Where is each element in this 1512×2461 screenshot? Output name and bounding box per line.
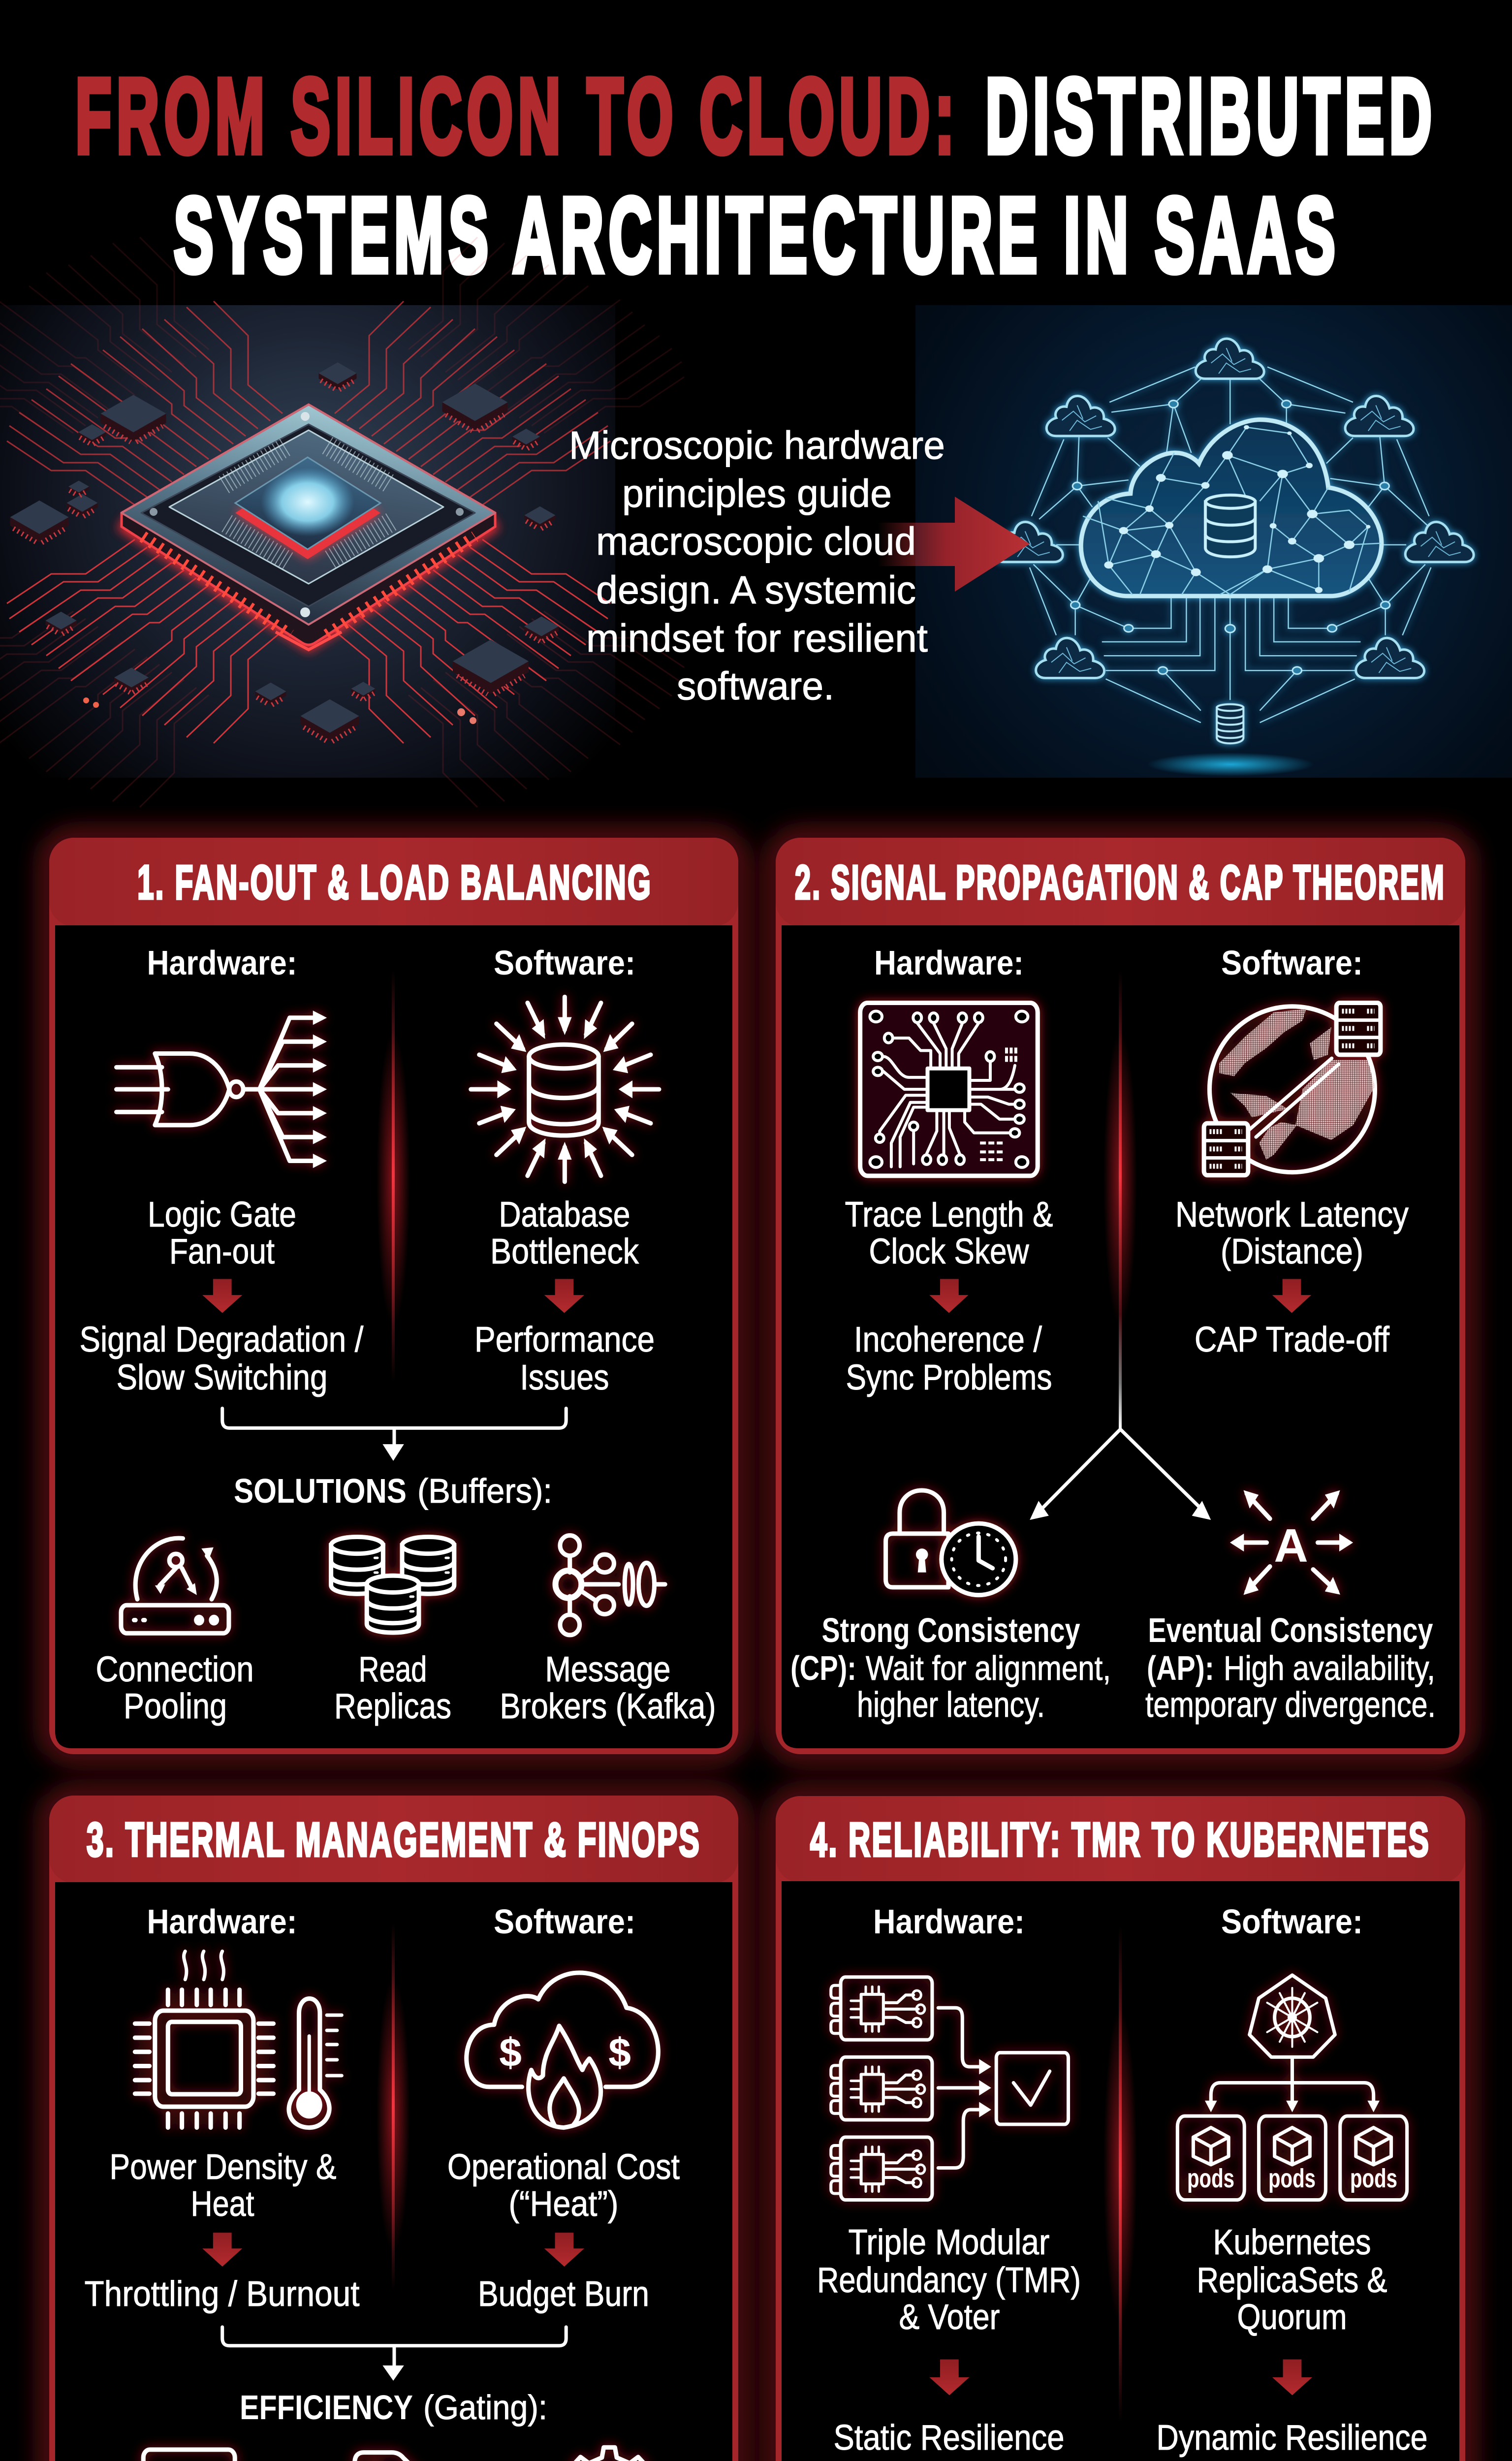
eventual consistency text: High availability, [1224, 1649, 1435, 1687]
solutions heading [234, 1472, 552, 1510]
link nodes [1071, 401, 1390, 674]
strong consistency text [790, 1611, 1111, 1725]
software cause [1175, 1195, 1409, 1271]
column headings: Software: [494, 1902, 635, 1941]
eventual consistency text [1145, 1611, 1436, 1725]
arrow: hardware down [929, 1279, 969, 1313]
column headings [873, 1902, 1363, 1941]
icon: read replicas [331, 1537, 454, 1633]
title [75, 56, 1437, 294]
icon: scale to zero [143, 2450, 235, 2461]
solution labels [95, 1650, 716, 1726]
software effect: Performance [474, 1320, 655, 1359]
column headings: Software: [494, 944, 635, 982]
die [235, 467, 380, 559]
icon: cloud cost burn [467, 1973, 658, 2128]
icon: kubernetes replica pods [1177, 1975, 1407, 2200]
software cause: Database [499, 1195, 630, 1234]
arrow: hardware down [202, 1279, 242, 1313]
intro text: mindset for resilient [586, 616, 928, 660]
column headings: Hardware: [147, 944, 297, 982]
software effect: Dynamic Resilience [1157, 2418, 1427, 2458]
software cause: (“Heat”) [509, 2184, 618, 2224]
icon: hot chip and thermometer [135, 1951, 342, 2128]
bottom database [1217, 704, 1243, 743]
software cause: (Distance) [1221, 1232, 1363, 1271]
arrow: silicon to cloud [878, 497, 1030, 592]
column headings: Hardware: [147, 1902, 297, 1941]
hardware effect: Signal Degradation / [80, 1320, 363, 1359]
heading: 3. THERMAL MANAGEMENT & FINOPS [87, 1813, 701, 1866]
hardware cause: Redundancy (TMR) [817, 2261, 1081, 2300]
arrow: hardware down [929, 2360, 969, 2395]
solutions heading: (Buffers): [417, 1472, 552, 1510]
icon: connection pooling [121, 1538, 229, 1633]
solution labels: Message [545, 1650, 670, 1689]
bracket arrow to efficiency [222, 2327, 566, 2381]
software effect: Budget Burn [478, 2274, 649, 2314]
strong consistency text: Strong Consistency [822, 1611, 1080, 1649]
hardware effect: Slow Switching [116, 1358, 328, 1397]
hardware cause [845, 1195, 1053, 1271]
software cause [447, 2147, 680, 2224]
solution labels: Brokers (Kafka) [500, 1687, 716, 1726]
icon: availability: A [1274, 1519, 1308, 1572]
hardware cause [109, 2147, 337, 2224]
software cause: Kubernetes [1213, 2223, 1371, 2262]
icon: kubernetes replica pods: pods [1350, 2164, 1397, 2193]
circuit traces [0, 237, 684, 807]
software cause: ReplicaSets & [1197, 2261, 1387, 2300]
software effect: CAP Trade-off [1195, 1320, 1390, 1359]
hardware cause: Power Density & [109, 2147, 337, 2187]
cloud mesh [1083, 427, 1381, 595]
intro text: Microscopic hardware [569, 423, 945, 467]
icon: lock and clock [886, 1490, 1016, 1595]
hardware cause [148, 1195, 296, 1271]
hardware effect: Sync Problems [846, 1358, 1052, 1397]
strong consistency text: (CP): [790, 1649, 856, 1687]
software cause: Bottleneck [490, 1232, 639, 1271]
panel 2: signal propagation and CAP theorem [776, 838, 1465, 1754]
icon: cloud cost burn: $ [608, 2030, 631, 2075]
column headings: Software: [1221, 1902, 1363, 1941]
center divider [377, 970, 410, 1382]
hardware cause [817, 2223, 1081, 2337]
icon: availability [1234, 1494, 1349, 1591]
efficiency heading: EFFICIENCY [240, 2388, 413, 2427]
icon: price tag [355, 2453, 443, 2461]
strong consistency text: higher latency. [857, 1685, 1045, 1725]
center divider [1103, 1926, 1137, 2422]
main cloud [1081, 420, 1382, 596]
hardware cause: Clock Skew [869, 1232, 1029, 1271]
split arrows [1030, 1429, 1211, 1520]
software cause [1197, 2223, 1387, 2337]
hardware cause: Fan-out [169, 1232, 275, 1271]
heading: 1. FAN-OUT & LOAD BALANCING [137, 855, 652, 909]
solution labels: Connection [95, 1650, 254, 1689]
icon: circuit board [860, 1003, 1038, 1176]
panel 4: reliability [776, 1796, 1465, 2461]
eventual consistency text: temporary divergence. [1145, 1685, 1436, 1725]
software effect [474, 1320, 655, 1397]
strong consistency text: Wait for alignment, [866, 1649, 1111, 1687]
hardware effect: Incoherence / [854, 1320, 1042, 1359]
icon: cloud cost burn: $ [499, 2030, 522, 2075]
arrow: software down [1272, 2360, 1312, 2395]
software cause: Operational Cost [447, 2147, 680, 2187]
icon: gear [563, 2447, 656, 2461]
solution labels: Replicas [334, 1687, 451, 1726]
icon: triple modular redundancy [831, 1977, 1069, 2200]
solution labels: Read [358, 1650, 427, 1689]
column headings: Hardware: [873, 1902, 1025, 1941]
icon: logic gate fan-out [117, 1010, 327, 1168]
hardware effect: Static Resilience [834, 2418, 1064, 2458]
solutions heading: SOLUTIONS [234, 1472, 407, 1510]
hardware cause: Triple Modular [849, 2223, 1049, 2262]
efficiency heading: (Gating): [423, 2388, 547, 2427]
intro text: design. A systemic [596, 568, 916, 612]
software cause: Network Latency [1175, 1195, 1409, 1234]
icon: kubernetes replica pods: pods [1187, 2164, 1234, 2193]
icon: message brokers [555, 1535, 665, 1635]
surface components [10, 362, 559, 742]
arrow: software down [1272, 1279, 1311, 1313]
software cause [490, 1195, 639, 1271]
arrow: software down [544, 2233, 584, 2267]
eventual consistency text: Eventual Consistency [1148, 1611, 1433, 1649]
icon: globe with linked servers [1204, 1003, 1381, 1175]
software effect: Issues [520, 1358, 609, 1397]
icon: database bottleneck [471, 997, 659, 1182]
efficiency heading [240, 2388, 547, 2427]
hardware cause: Trace Length & [845, 1195, 1053, 1234]
eventual consistency text: (AP): [1147, 1649, 1214, 1687]
hardware effect [846, 1320, 1052, 1397]
intro text [569, 423, 945, 708]
hardware cause: Heat [191, 2184, 254, 2224]
column headings [874, 944, 1363, 982]
hardware cause: Logic Gate [148, 1195, 296, 1234]
software cause: Quorum [1237, 2298, 1347, 2337]
satellite clouds [994, 339, 1474, 678]
arrow: software down [544, 1279, 584, 1313]
hardware cause: & Voter [899, 2298, 1000, 2337]
chip plate [122, 405, 495, 625]
intro text: software. [677, 664, 834, 708]
illustration: cloud network [915, 305, 1512, 778]
column headings: Software: [1221, 944, 1363, 982]
column headings: Hardware: [874, 944, 1024, 982]
illustration: silicon chip [0, 237, 684, 807]
hardware effect: Throttling / Burnout [85, 2274, 359, 2314]
cloud database [1205, 495, 1255, 557]
hardware effect [80, 1320, 363, 1397]
solution labels: Pooling [124, 1687, 227, 1726]
panel 1: fan-out and load balancing [49, 838, 738, 1754]
column headings [147, 944, 635, 982]
chip base glow [122, 522, 495, 643]
column headings [147, 1902, 635, 1941]
arrow: hardware down [202, 2233, 242, 2267]
center divider [1103, 970, 1137, 1429]
bracket arrow to solutions [222, 1408, 566, 1461]
network links [1030, 367, 1431, 723]
intro text: macroscopic cloud [596, 519, 916, 563]
icon: kubernetes replica pods: pods [1268, 2164, 1316, 2193]
panel 3: thermal management and finops [49, 1796, 738, 2461]
intro text: principles guide [622, 472, 892, 515]
center divider [377, 1923, 410, 2290]
